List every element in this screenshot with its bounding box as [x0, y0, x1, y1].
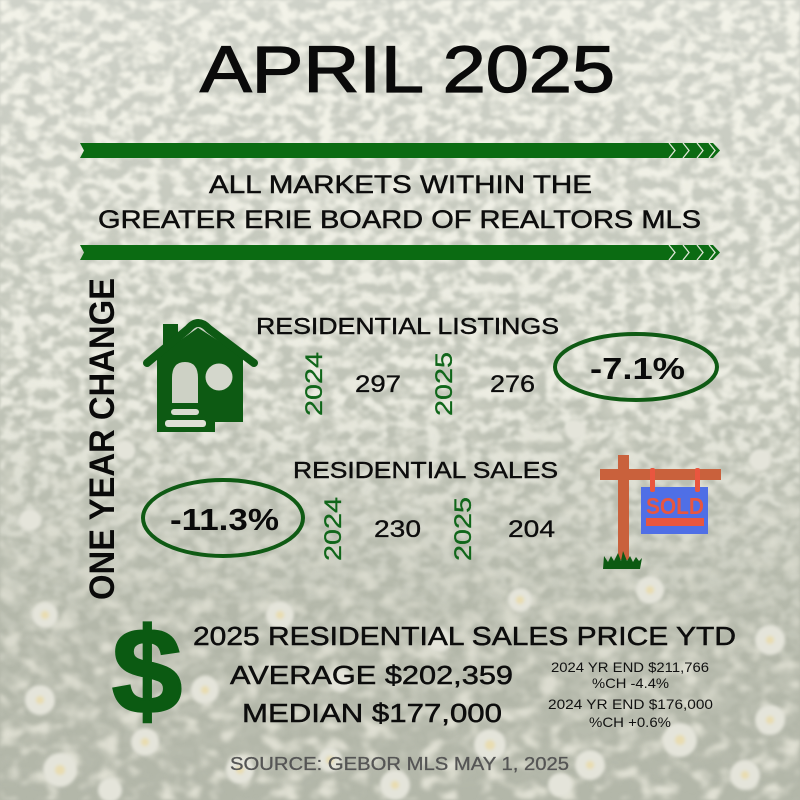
value 204: 204	[508, 516, 555, 543]
median comparison	[548, 696, 713, 730]
year label 2025: 2025	[450, 497, 477, 561]
median price: MEDIAN $177,000	[242, 698, 502, 728]
subtitle: ALL MARKETS WITHIN THE	[209, 171, 592, 199]
callout: sales change	[143, 480, 303, 556]
year label 2025: 2025	[431, 352, 458, 416]
average comparison	[551, 659, 709, 691]
panel: residential sales	[143, 457, 558, 561]
value 297: 297	[355, 371, 401, 398]
title: APRIL 2025	[200, 32, 615, 106]
heading: sales price: 2025 RESIDENTIAL SALES PRICE YTD	[193, 621, 736, 651]
icon: sold sign: SOLD	[646, 493, 704, 519]
median comparison: 2024 YR END $176,000	[548, 696, 713, 712]
subtitle	[98, 171, 701, 234]
callout: listings change	[555, 334, 717, 400]
subtitle: GREATER ERIE BOARD OF REALTORS MLS	[98, 206, 701, 234]
average comparison: 2024 YR END $211,766	[551, 659, 709, 675]
heading: residential sales: RESIDENTIAL SALES	[293, 457, 558, 483]
year label 2024: 2024	[301, 352, 328, 416]
icon: house	[147, 323, 254, 432]
icon: sold sign	[600, 455, 721, 569]
value 276: 276	[490, 371, 535, 398]
value 230: 230	[374, 516, 421, 543]
side heading: one year change: ONE YEAR CHANGE	[83, 278, 122, 600]
average price: AVERAGE $202,359	[230, 660, 513, 690]
heading: residential listings: RESIDENTIAL LISTINGS	[256, 313, 559, 339]
panel: residential listings	[256, 313, 717, 416]
icon: dollar sign: $	[112, 603, 182, 739]
panel: sales price	[193, 621, 736, 730]
ribbon divider: top	[80, 143, 720, 158]
median comparison: %CH +0.6%	[589, 714, 671, 730]
year label 2024: 2024	[320, 497, 347, 561]
callout: sales change: -11.3%	[170, 502, 279, 537]
source note: SOURCE: GEBOR MLS MAY 1, 2025	[230, 754, 569, 774]
ribbon divider: bottom	[80, 245, 720, 260]
callout: listings change: -7.1%	[590, 351, 685, 386]
average comparison: %CH -4.4%	[592, 675, 669, 691]
